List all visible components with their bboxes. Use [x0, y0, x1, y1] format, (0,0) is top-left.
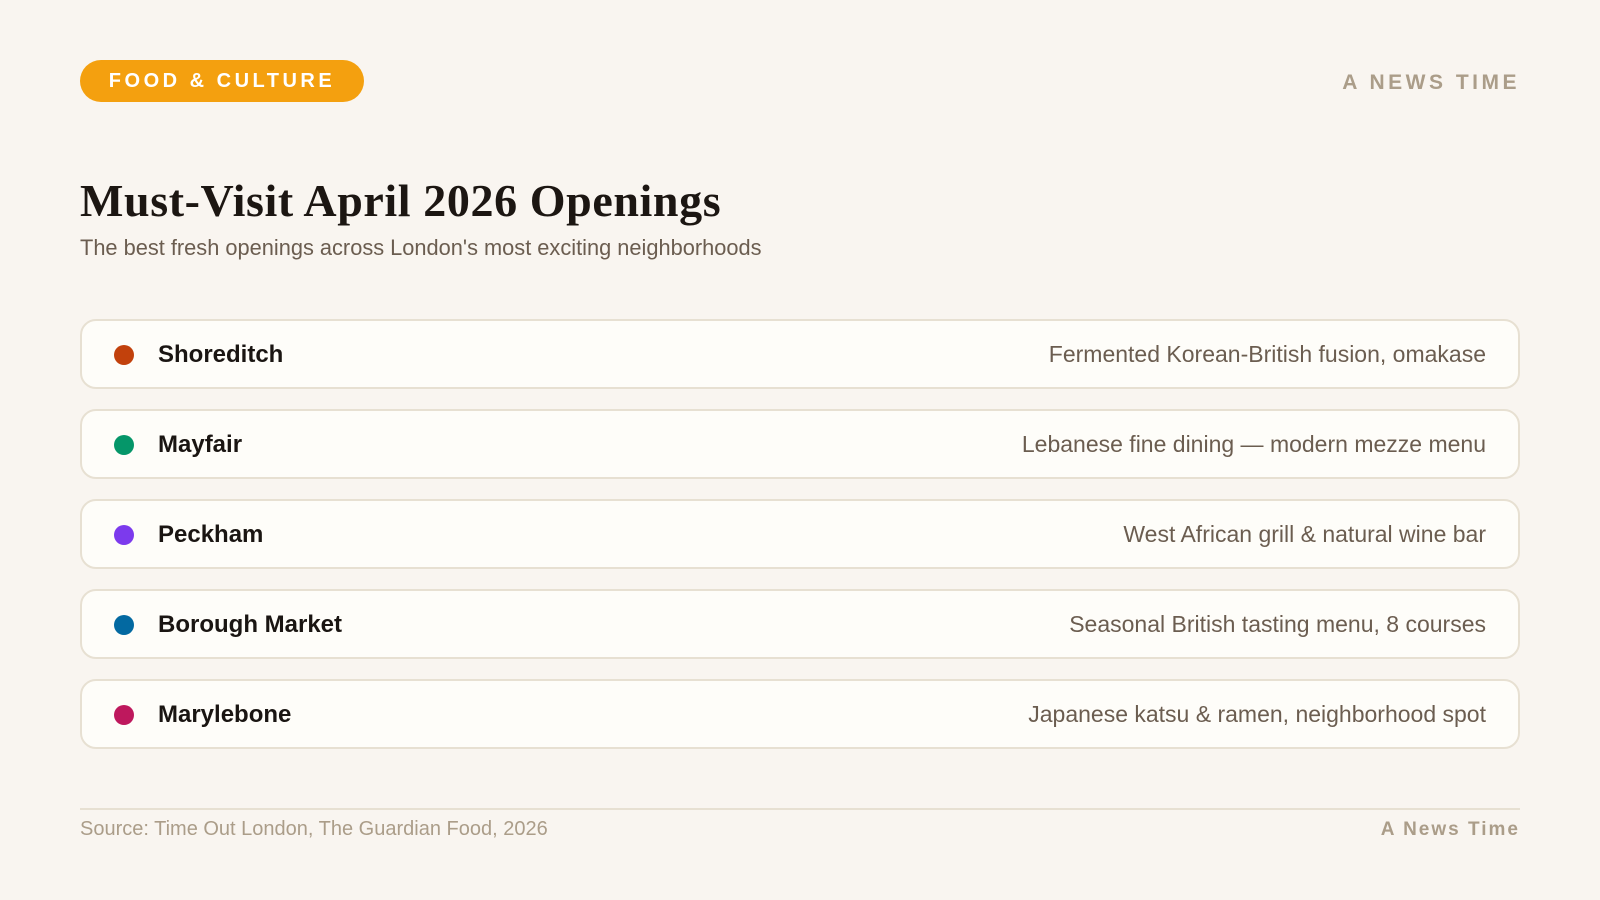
card: Shoreditch: [80, 319, 1520, 389]
card: Marylebone: Japanese katsu & ramen, neighborhood spot: [1028, 701, 1486, 727]
category pill: FOOD & CULTURE: [109, 70, 335, 92]
category pill: [80, 60, 364, 102]
card: Mayfair: Lebanese fine dining — modern mezze menu: [1022, 431, 1486, 457]
source footer: Source: Time Out London, The Guardian Food, 2026: [80, 818, 548, 840]
list of openings: [80, 319, 1520, 749]
card: Peckham: West African grill & natural wine bar: [1123, 521, 1486, 547]
card: Mayfair: [80, 409, 1520, 479]
card: Peckham: Peckham: [158, 521, 263, 548]
title: Must-Visit April 2026 Openings: [80, 175, 721, 226]
card: Peckham: [80, 499, 1520, 569]
subtitle: The best fresh openings across London's most exciting neighborhoods: [80, 235, 762, 260]
card: Mayfair: Mayfair: [158, 431, 242, 458]
footer brand: A News Time: [1381, 819, 1520, 840]
card: Borough Market: Seasonal British tasting menu, 8 courses: [1069, 611, 1486, 637]
card: Shoreditch: Fermented Korean-British fusion, omakase: [1049, 341, 1486, 367]
brand top right: A NEWS TIME: [1342, 71, 1520, 94]
card: Marylebone: [80, 679, 1520, 749]
card: Marylebone: Marylebone: [158, 701, 291, 728]
card: Shoreditch: Shoreditch: [158, 341, 283, 368]
card: Borough Market: Borough Market: [158, 611, 342, 638]
card: Borough Market: [80, 589, 1520, 659]
